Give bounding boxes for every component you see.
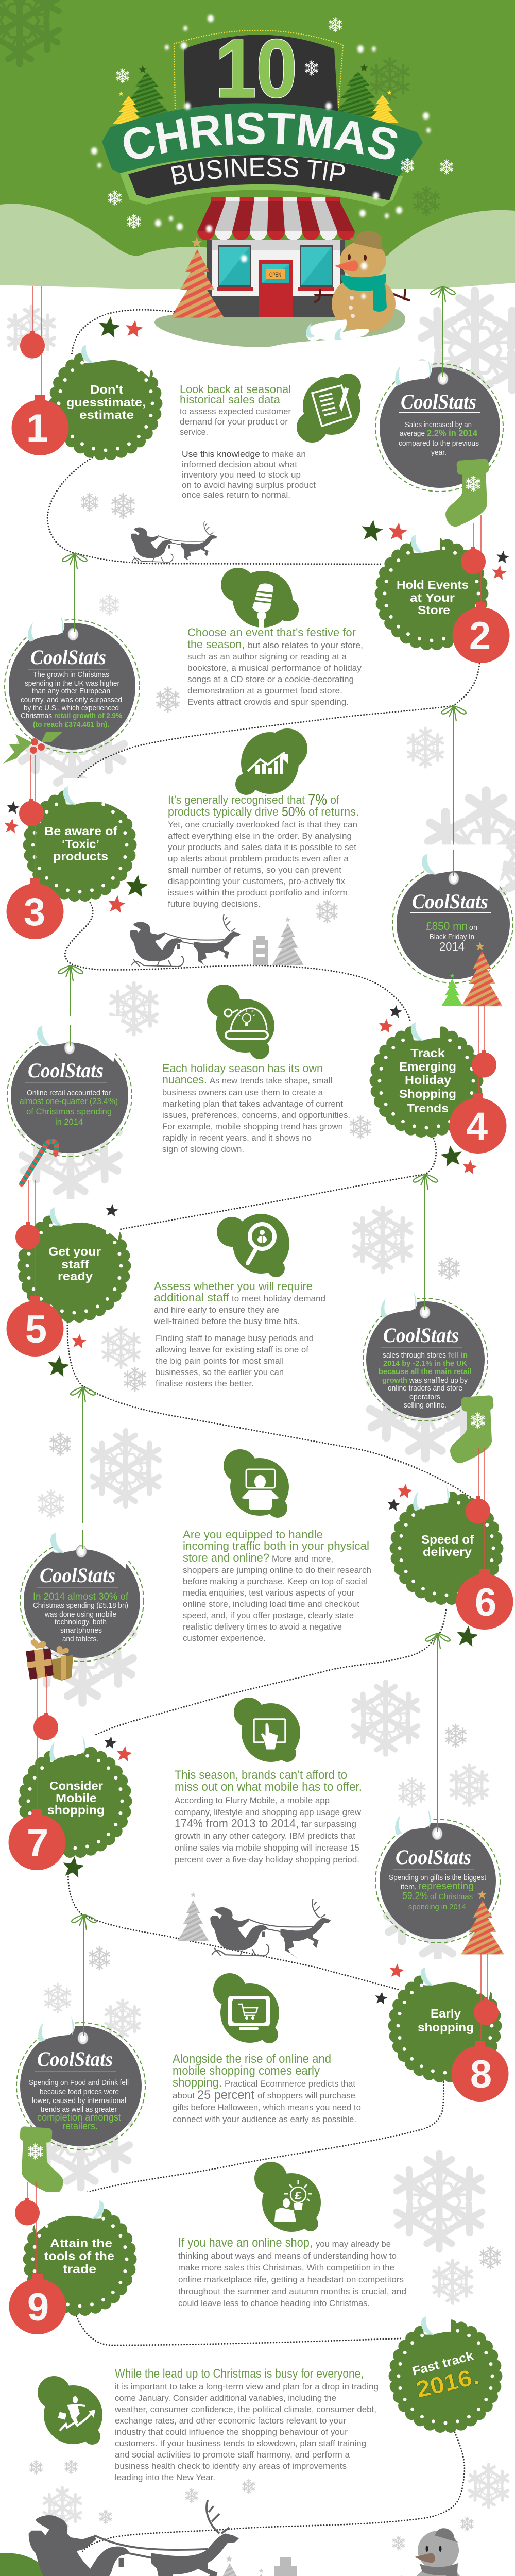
stats tag 6: and tablets. — [62, 1635, 98, 1643]
text: tip 3: future buying decisions. — [168, 900, 261, 909]
text: tip 3: It’s generally recognised that — [168, 793, 305, 806]
fast track badge: Fast track — [411, 2349, 475, 2379]
text: tip 5: well-trained before the busy time hits. — [153, 1317, 300, 1326]
stats tag 7: of Christmas — [430, 1893, 473, 1901]
text: tip 7: miss out on what mobile has to offer. — [175, 1780, 362, 1794]
text: tip 10: weather, consumer confidence, the political climate, consumer debt, — [114, 2405, 376, 2414]
header background — [0, 0, 515, 361]
text: tip 9 — [178, 2235, 406, 2308]
text: tip 7: 174% from 2013 to 2014, — [175, 1817, 299, 1830]
tip badge 2: Hold Events — [397, 578, 469, 591]
text: tip 6: shoppers are jumping online to do their research — [183, 1566, 371, 1575]
ornament number 5: 5 — [25, 1308, 47, 1351]
text: tip 6: online store, including load time and checkout — [183, 1600, 359, 1609]
text: tip 4: issues, preferences, concerns, and opportunities. — [162, 1111, 350, 1120]
text: tip 8: 25 percent — [197, 2088, 254, 2102]
stats tag 2: spending in the UK was higher — [25, 680, 119, 688]
text: tip 8: gifts before Halloween, which means you need to — [173, 2103, 361, 2112]
text: tip 10: exchange rates, and other economic factors relevant to your — [115, 2416, 347, 2426]
stats tag 7: representing — [418, 1881, 474, 1892]
text: tip 1: on to avoid having surplus product — [182, 481, 316, 490]
stats tag 6: In 2014 almost 30% of — [33, 1591, 129, 1602]
stats tag 4 — [7, 1016, 132, 1184]
candy cane — [22, 1141, 57, 1184]
stats tag 8: lower, caused by international — [32, 2097, 126, 2105]
tip badge 1: Don't — [90, 383, 123, 396]
mid scene with sleigh and tree — [130, 914, 304, 969]
text: tip 1: service. — [180, 428, 208, 437]
text: tip 1: historical sales data — [180, 393, 281, 406]
holly — [3, 732, 63, 764]
text: tip 3: products typically drive — [168, 805, 279, 818]
grey snowman — [399, 2528, 479, 2576]
stats tag 5: because all the main retail — [379, 1368, 472, 1376]
text: tip 7: company, lifestyle and shopping app usage grew — [175, 1808, 361, 1817]
text: tip 7 — [175, 1768, 362, 1865]
number ten panel: 10 — [215, 22, 297, 114]
stats tag 8 — [16, 2016, 145, 2194]
tip badge 3: Be aware of — [44, 824, 117, 838]
stats tag 8: completion amongst — [37, 2112, 122, 2123]
stats tag 6: technology, both — [55, 1618, 107, 1626]
icon: pound light bulb and businessman: £ — [295, 2190, 302, 2201]
text: tip 9: If you have an online shop, — [178, 2235, 313, 2250]
trees on tag — [441, 942, 503, 1006]
text: tip 6 — [183, 1528, 371, 1643]
text: tip 3: disappointing your customers, pro-actively fix — [168, 877, 346, 886]
tip badge 2 — [381, 527, 482, 644]
ornament number 3 — [6, 799, 64, 939]
green ground mound — [154, 309, 405, 347]
text: tip 1: Look back at seasonal — [180, 383, 291, 396]
text: tip 8: mobile shopping comes early — [173, 2064, 320, 2078]
ornament number 9: 9 — [27, 2285, 49, 2329]
text: tip 10: come January. Consider additional variables, including the — [115, 2394, 336, 2403]
stats tag 7: 59.2% — [402, 1891, 428, 1902]
footer sleigh — [29, 2500, 239, 2576]
text: tip 10: and social activities to promote staff harmony, and perform a — [115, 2450, 350, 2460]
text: tip 6: customer experience. — [183, 1634, 266, 1643]
text: tip 10: business health check to identify any areas of improvements — [115, 2462, 347, 2471]
tree on tag — [461, 1890, 504, 1954]
text: tip 3: of — [330, 793, 340, 806]
text: tip 5: additional staff — [154, 1291, 230, 1304]
ornament number 8: 8 — [470, 2053, 492, 2096]
text: tip 2: Events attract crowds and spur spending. — [187, 698, 349, 707]
stats tag 1: CoolStats — [401, 390, 476, 413]
text: tip 7: According to Flurry Mobile, a mobile app — [175, 1796, 330, 1805]
text: tip 5 — [153, 1280, 325, 1388]
text: tip 7: online sales via mobile shopping will increase 15 — [175, 1843, 359, 1853]
stats tag 1: average — [400, 430, 425, 438]
grey building — [274, 2557, 297, 2576]
tip badge 1: guesstimate, — [66, 396, 146, 409]
text: tip 4: rapidly in recent years, and it shows no — [162, 1133, 312, 1143]
ornament number 7 — [8, 1713, 66, 1870]
text: tip 1: to assess expected customer — [180, 407, 291, 416]
icon: santa hat with light bulb — [207, 985, 274, 1059]
stats tag 1 — [375, 360, 503, 527]
stats tag 1: Sales increased by an — [405, 421, 472, 429]
text: tip 5: to meet holiday demand — [232, 1294, 325, 1303]
stocking — [450, 1395, 494, 1463]
stats tag 6: CoolStats — [40, 1564, 115, 1587]
shop door with open sign: OPEN — [269, 271, 281, 278]
tip badge 8: Early — [431, 2007, 461, 2020]
stats tag 5: operators — [409, 1393, 440, 1401]
stats tag 2: by the U.S., which experienced — [24, 704, 119, 713]
sleigh illustration 1 — [131, 521, 217, 564]
fast track badge — [395, 2308, 496, 2427]
text: tip 1: demand for your product or — [180, 417, 288, 427]
tip badge 2: at Your — [410, 591, 455, 604]
ornament number 7: 7 — [27, 1821, 48, 1865]
tip badge 3 — [29, 778, 139, 895]
tip badge 8 — [394, 1959, 496, 2076]
text: tip 3: of returns. — [308, 805, 359, 818]
text: tip 3: affect everything else in the order. By analysing — [168, 832, 352, 841]
stats tag 2 — [3, 613, 140, 764]
tip badge 4: Trends — [407, 1101, 449, 1115]
ornament number 8 — [451, 1997, 509, 2102]
title trees — [113, 64, 399, 124]
icon: hand on tablet — [234, 1698, 300, 1762]
text: tip 3: up alerts about problem products even after a — [168, 854, 349, 863]
tip badge 7 — [25, 1736, 126, 1852]
text: tip 3: small number of returns, so you can prevent — [168, 866, 341, 875]
tip badge 4: Emerging — [399, 1060, 456, 1073]
tip badge 6 — [396, 1485, 497, 1599]
text: tip 5: businesses, so the earlier you can — [156, 1368, 284, 1377]
text: tip 2: but also relates to your store, — [248, 641, 363, 650]
tip badge 7: Mobile — [56, 1791, 97, 1805]
text: tip 6: incoming traffic both in your physical — [183, 1539, 369, 1552]
text: tip 4: business owners can use them to create a — [162, 1088, 323, 1097]
icon: document and pencil — [297, 374, 361, 443]
icon: runner on rising arrow — [38, 2376, 102, 2445]
text: tip 1: inventory you need to stock up — [182, 470, 301, 480]
text: tip 5: and hire early to ensure they are — [154, 1306, 279, 1315]
tip badge 9 — [28, 2192, 130, 2310]
stats tag 4: Online retail accounted for — [27, 1089, 111, 1097]
text: tip 10: industry that could influence the shopping behaviour of your — [115, 2428, 348, 2437]
stats tag 7: CoolStats — [396, 1845, 471, 1869]
text: tip 2: Choose an event that’s festive for — [187, 626, 356, 639]
stats tag 3: Black Friday In — [430, 933, 474, 941]
stats tag 6: was done using mobile — [44, 1611, 116, 1619]
dotted route path — [47, 310, 479, 2552]
stats tag 5: CoolStats — [383, 1324, 459, 1347]
text: tip 8: Alongside the rise of online and — [173, 2052, 331, 2066]
text: tip 7: percent over a five-day holiday shopping period. — [175, 1855, 359, 1865]
text: tip 6: More and more, — [272, 1554, 333, 1564]
stats tag 8: Spending on Food and Drink fell — [29, 2079, 129, 2087]
text: tip 1: informed decision about what — [182, 460, 297, 469]
text: tip 2: songs at a CD store or a cookie-decorating — [187, 675, 354, 684]
text: tip 7: far surpassing — [301, 1820, 356, 1829]
ornament number 6: 6 — [475, 1581, 496, 1624]
shop windows — [217, 245, 334, 291]
lower dark banner: BUSINESS TIP — [171, 158, 345, 185]
ornament number 1: 1 — [26, 406, 48, 450]
stats tag 5: online traders and store — [388, 1384, 462, 1393]
stats tag 4: in 2014 — [55, 1117, 83, 1127]
text: tip 5: finalise rosters the better. — [156, 1379, 254, 1388]
text: tip 1 — [180, 383, 316, 500]
ornament number 2 — [452, 547, 510, 663]
grey trees — [213, 2555, 272, 2576]
text: tip 3: your products and sales data it is possible to set — [168, 843, 356, 852]
text: tip 9: you may already be — [316, 2240, 391, 2249]
title lockup — [102, 22, 423, 226]
ornament number 6 — [456, 1496, 513, 1630]
text: tip 6: media enquiries, test various aspects of your — [183, 1588, 355, 1598]
stats tag 3: 2014 — [439, 940, 465, 953]
tip badge 8: shopping — [418, 2021, 474, 2034]
text: tip 3: Yet, one crucially overlooked fact is that they can — [168, 820, 357, 829]
text: tip 10: While the lead up to Christmas is busy for everyone, — [115, 2367, 364, 2381]
text: tip 8: about — [173, 2091, 195, 2100]
text: tip 9: thinking about ways and means of understanding how to — [178, 2251, 397, 2261]
gift boxes — [26, 1639, 73, 1681]
icon: growth chart — [235, 728, 307, 795]
tip badge 5: staff — [61, 1258, 89, 1271]
tip badge 3: products — [53, 850, 108, 863]
hanging strings for ornaments — [28, 286, 487, 2274]
text: tip 4: marketing plan that takes advantage of current — [162, 1099, 343, 1109]
icon: magnifier with people — [217, 1214, 289, 1277]
stats tag 5: was snaffled up by — [409, 1377, 468, 1385]
header sparkle snow — [91, 15, 454, 230]
icon: person at monitor — [224, 1449, 289, 1518]
text: tip 5: the big pain points for most small — [156, 1357, 284, 1366]
icon: microphone — [221, 568, 299, 628]
stats tag 5: selling online. — [404, 1401, 447, 1410]
stats tag 2: country, and was only surpassed — [21, 696, 122, 704]
stats tag 1: 2.2% in 2014 — [427, 428, 477, 438]
shop awning — [197, 197, 355, 240]
text: tip 10 — [114, 2367, 379, 2482]
stocking — [445, 459, 489, 527]
stats tag 8: retailers. — [62, 2121, 98, 2132]
text: tip 8: of shoppers will purchase — [258, 2091, 355, 2100]
text: tip 4: Each holiday season has its own — [162, 1062, 323, 1075]
stats tag 7: Spending on gifts is the biggest — [389, 1874, 486, 1882]
lower dark banner — [120, 155, 403, 207]
stats tag 3 — [392, 844, 513, 1006]
icon: pound light bulb and businessman — [254, 2162, 321, 2232]
stats tag 7: spending in 2014 — [408, 1903, 466, 1911]
tip badge 6: delivery — [423, 1545, 472, 1558]
text: tip 9: online marketplace rife, getting a headstart on competitors — [178, 2275, 404, 2284]
text: tip 8: Practical Ecommerce predicts that — [225, 2079, 355, 2089]
stats tag 5: fell in — [448, 1351, 468, 1360]
text: tip 3: 50% — [282, 805, 305, 819]
stocking — [20, 2126, 63, 2194]
text: tip 3: 7% — [308, 792, 327, 808]
text: tip 3: issues within the product portfolio and inform — [168, 888, 348, 897]
stats tag 2: Christmas — [21, 712, 52, 720]
text: tip 2: demonstration at a gourmet food store. — [187, 686, 342, 696]
shop illustration — [170, 197, 409, 341]
decorative stars — [3, 315, 510, 2005]
stats tag 6: smartphones — [60, 1626, 102, 1635]
text: tip 5: Assess whether you will require — [154, 1280, 313, 1293]
stats tag 5 — [363, 1292, 494, 1463]
ornament number 2: 2 — [469, 614, 491, 658]
ornament number 1 — [11, 331, 69, 455]
text: tip 4 — [162, 1062, 350, 1154]
stats tag 5: 2014 by -2.1% in the UK — [383, 1360, 468, 1368]
text: tip 5: allowing leave for existing staff is one of — [156, 1345, 308, 1354]
text: tip 1: to make an — [262, 450, 306, 459]
tip badge 6: Speed of — [421, 1533, 474, 1546]
stats tag 3: on — [469, 924, 477, 932]
tip badge 4: Track — [410, 1046, 445, 1060]
tip badge 1 — [55, 336, 157, 454]
ornament number 9 — [9, 2198, 66, 2334]
text: tip 3 — [168, 792, 359, 909]
text: tip 10: it is important to take a long-term view and plan for a drop in trading — [115, 2382, 379, 2392]
number ten panel — [174, 22, 343, 118]
text: tip 6: speed, and, if you offer postage, clearly state — [183, 1611, 354, 1620]
text: tip 9: could leave less to chance heading into Christmas. — [178, 2299, 370, 2308]
stats tag 5: sales through stores — [383, 1351, 446, 1360]
tip badge 4: Holiday — [405, 1073, 451, 1087]
text: tip 8: connect with your audience as early as possible. — [173, 2115, 356, 2124]
text: tip 6: realistic delivery times to avoid a negative — [183, 1622, 342, 1632]
stats tag 4: almost one-quarter (23.4%) — [20, 1096, 118, 1106]
stats tag 8: because food prices were — [40, 2088, 119, 2096]
stats tag 1: year. — [431, 449, 447, 457]
tip badge 4: Shopping — [399, 1087, 456, 1100]
text: tip 9: throughout the summer and autumn months is crucial, and — [178, 2287, 406, 2296]
stats tag 5: growth — [382, 1377, 407, 1385]
stats tag 7: item, — [401, 1883, 417, 1891]
stats tag 3: CoolStats — [412, 890, 488, 913]
text: tip 10: leading into the New Year. — [115, 2473, 215, 2482]
stats tag 2: The growth in Christmas — [33, 671, 109, 679]
text: tip 6: Are you equipped to handle — [183, 1528, 323, 1541]
text: tip 1: Use this knowledge — [182, 450, 260, 459]
text: tip 4: sign of slowing down. — [162, 1145, 244, 1154]
text: tip 2: the season, — [187, 638, 245, 651]
text: tip 4: nuances. — [162, 1073, 207, 1086]
stats tag 7 — [375, 1809, 504, 1954]
stats tag 2: than any other European — [32, 687, 110, 696]
text: tip 5: Finding staff to manage busy periods and — [156, 1334, 314, 1343]
text: tip 6: before making a purchase. Keep on top of social — [183, 1577, 368, 1586]
stats tag 1: compared to the previous — [399, 439, 479, 448]
text: tip 1: once sales return to normal. — [182, 490, 290, 500]
tree and sleigh scene 3 — [177, 1892, 331, 1958]
text: tip 2 — [187, 626, 363, 707]
stats tag 2: (to reach £374.461 bn). — [33, 721, 109, 729]
tip badge 3: ‘Toxic’ — [62, 837, 99, 851]
tip badge 5: ready — [58, 1269, 93, 1283]
tip badge 2: Store — [418, 603, 450, 617]
tip badge 1: estimate — [79, 408, 134, 421]
text: tip 6: store and online? — [183, 1551, 269, 1564]
ornament number 3: 3 — [24, 890, 45, 934]
snowman — [206, 225, 409, 341]
text: tip 7: This season, brands can’t afford to — [175, 1768, 347, 1782]
stats tag 6 — [20, 1523, 144, 1681]
stats tag 2: retail growth of 2.9% — [54, 712, 122, 720]
text: tip 9: make more sales this Christmas. With competition in the — [178, 2263, 394, 2273]
footer scene — [0, 2500, 397, 2576]
tip badge 7: shopping — [47, 1803, 105, 1817]
ornament number 4 — [449, 1050, 507, 1154]
ornament number 4: 4 — [466, 1105, 488, 1148]
ornament number 5 — [6, 1222, 64, 1357]
stats tag 4: of Christmas spending — [26, 1107, 112, 1116]
tip badge 7: Consider — [49, 1779, 103, 1792]
stats tag 8: CoolStats — [37, 2047, 113, 2071]
icon: monitor with shopping cart — [213, 1973, 279, 2043]
stats tag 6: Christmas spending (£5.18 bn) — [33, 1602, 128, 1610]
fast track badge: 2016. — [414, 2363, 482, 2403]
ribbon bows and strings — [58, 286, 466, 2038]
tip badge 9: tools of the — [44, 2249, 114, 2263]
stats tag 2: CoolStats — [30, 646, 106, 669]
text: tip 8: shopping. — [173, 2076, 222, 2090]
tip badge 4 — [376, 1014, 477, 1131]
christmas banner: CHRISTMAS — [124, 112, 398, 160]
small grey snowflakes — [29, 493, 502, 2550]
tree beside shop — [170, 237, 224, 318]
stats tag 8: trends as well as greater — [41, 2106, 117, 2114]
stats tag 3: £850 mn — [426, 920, 468, 933]
tip badge 5: Get your — [48, 1245, 101, 1258]
stats tag 4: CoolStats — [28, 1059, 104, 1082]
text: tip 2: bookstore, a musical performance of holiday — [187, 664, 362, 673]
tip badge 9: trade — [63, 2262, 96, 2276]
text: tip 10: customers. If your business tends to slowdown, plan staff training — [115, 2439, 366, 2448]
text: tip 4: As new trends take shape, small — [210, 1076, 332, 1086]
text: tip 2: such as an author signing or reading at a — [187, 652, 347, 662]
text: tip 8 — [173, 2052, 361, 2124]
tip badge 5 — [24, 1199, 126, 1316]
shop door with open sign — [259, 260, 293, 317]
text: tip 4: For example, mobile shopping trend has grown — [162, 1122, 343, 1131]
text: tip 7: growth in any other category. IBM predicts that — [175, 1832, 355, 1841]
green hills — [0, 2553, 217, 2576]
tip badge 9: Attain the — [50, 2236, 112, 2250]
